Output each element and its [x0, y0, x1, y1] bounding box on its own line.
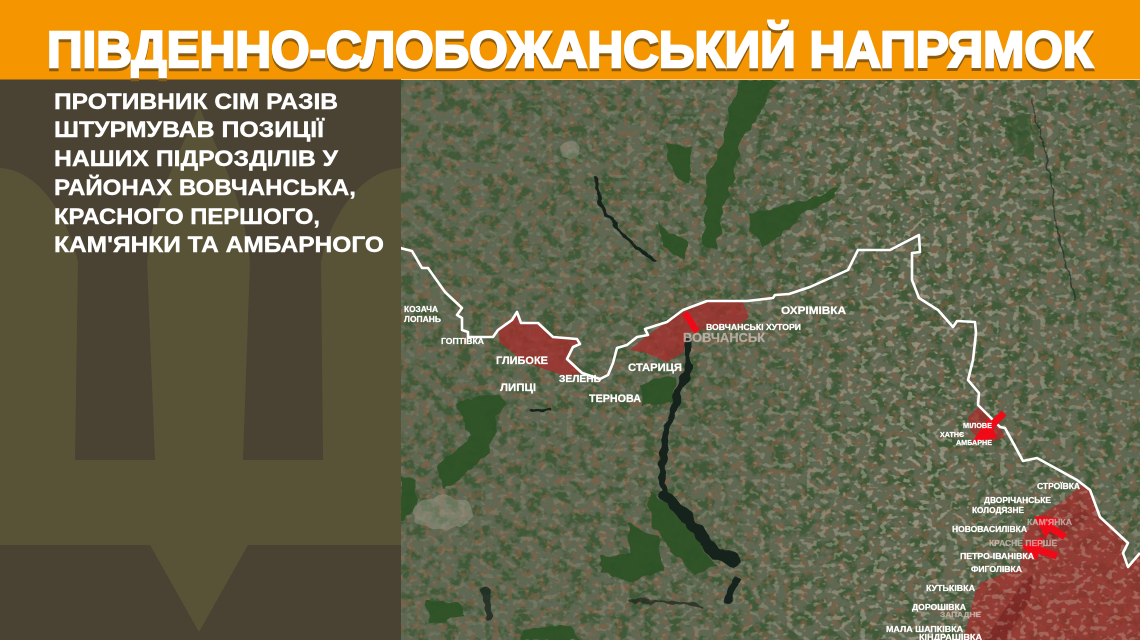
label: Kamianka: КАМ'ЯНКА	[1027, 518, 1072, 527]
region: occupied area at Vovchansk	[630, 301, 749, 362]
label: Vovchansk: ВОВЧАНСЬК	[683, 330, 765, 345]
satellite map	[400, 80, 1140, 641]
label: Stroivka: СТРОЇВКА	[1037, 482, 1080, 491]
icon: trident watermark	[0, 105, 401, 632]
label: Mala Shapkivka: МАЛА ШАПКІВКА	[886, 625, 963, 634]
label: Dvorichanske: ДВОРІЧАНСЬКЕ	[984, 496, 1052, 505]
title: ПІВДЕННО-СЛОБОЖАНСЬКИЙ НАПРЯМОК	[47, 20, 1094, 78]
label: Zapadne: ЗАПАДНЕ	[940, 610, 981, 619]
label: Kozacha Lopan second line: ЛОПАНЬ	[404, 315, 441, 324]
label: Hoptivka: ГОПТІВКА	[441, 337, 484, 346]
panel: left text panel	[0, 79, 401, 640]
label: Kozacha Lopan: КОЗАЧА	[404, 305, 438, 314]
frontline border	[400, 235, 1140, 567]
towns	[413, 140, 580, 530]
region: occupied area in the south-east	[963, 480, 1140, 641]
map labels	[404, 305, 1080, 641]
label: Kolodiazne: КОЛОДЯЗНЕ	[972, 506, 1025, 515]
label: Hlyboke: ГЛИБОКЕ	[496, 355, 548, 367]
region: occupied area north of Hlyboke	[498, 312, 582, 377]
text block: summary: КРАСНОГО ПЕРШОГО,	[54, 204, 320, 229]
rivers and reservoir	[485, 100, 1075, 615]
text block: summary: ШТУРМУВАВ ПОЗИЦІЇ	[54, 117, 325, 142]
header bar	[0, 0, 1140, 80]
region: occupied area at Milove	[968, 406, 1005, 442]
text block: summary	[54, 89, 384, 257]
label: Starytsia: СТАРИЦЯ	[628, 362, 682, 374]
label: Ternova: ТЕРНОВА	[589, 393, 641, 405]
label: Zelene: ЗЕЛЕНЬ	[559, 373, 601, 385]
arrow: Krasne Pershe assault	[1028, 543, 1057, 556]
text block: summary: РАЙОНАХ ВОВЧАНСЬКА,	[54, 175, 356, 200]
forests	[401, 82, 1035, 640]
label: Milove: МІЛОВЕ	[963, 421, 992, 430]
arrow: Milove–Ambarne assault	[979, 413, 1004, 438]
text block: summary: КАМ'ЯНКИ ТА АМБАРНОГО	[54, 232, 384, 257]
label: Ambarne: АМБАРНЕ	[956, 438, 992, 447]
label: Doroshivka: ДОРОШІВКА	[912, 603, 966, 612]
arrow: Kamianka assault	[1040, 520, 1065, 537]
label: Fyholivka: ФИГОЛІВКА	[971, 565, 1022, 574]
title: ПІВДЕННО-СЛОБОЖАНСЬКИЙ НАПРЯМОК	[47, 23, 1094, 81]
label: Khatnie: ХАТНЄ	[940, 430, 965, 439]
label: Lyptsi: ЛИПЦІ	[500, 382, 536, 394]
arrow: Vovchansk assault	[685, 313, 697, 332]
label: Kutkivka: КУТЬКІВКА	[926, 584, 975, 593]
label: Okhrimivka: ОХРІМІВКА	[781, 305, 846, 317]
text block: summary: НАШИХ ПІДРОЗДІЛІВ У	[54, 146, 338, 171]
text block: summary: ПРОТИВНИК СІМ РАЗІВ	[54, 89, 338, 114]
label: Vovchanski Khutory: ВОВЧАНСЬКІ ХУТОРИ	[706, 323, 801, 332]
label: Petro-Ivanivka: ПЕТРО-ІВАНІВКА	[960, 552, 1034, 561]
label: Krasne Pershe: КРАСНЕ ПЕРШЕ	[989, 539, 1058, 548]
label: Novovasylivka: НОВОВАСИЛІВКА	[952, 525, 1027, 534]
